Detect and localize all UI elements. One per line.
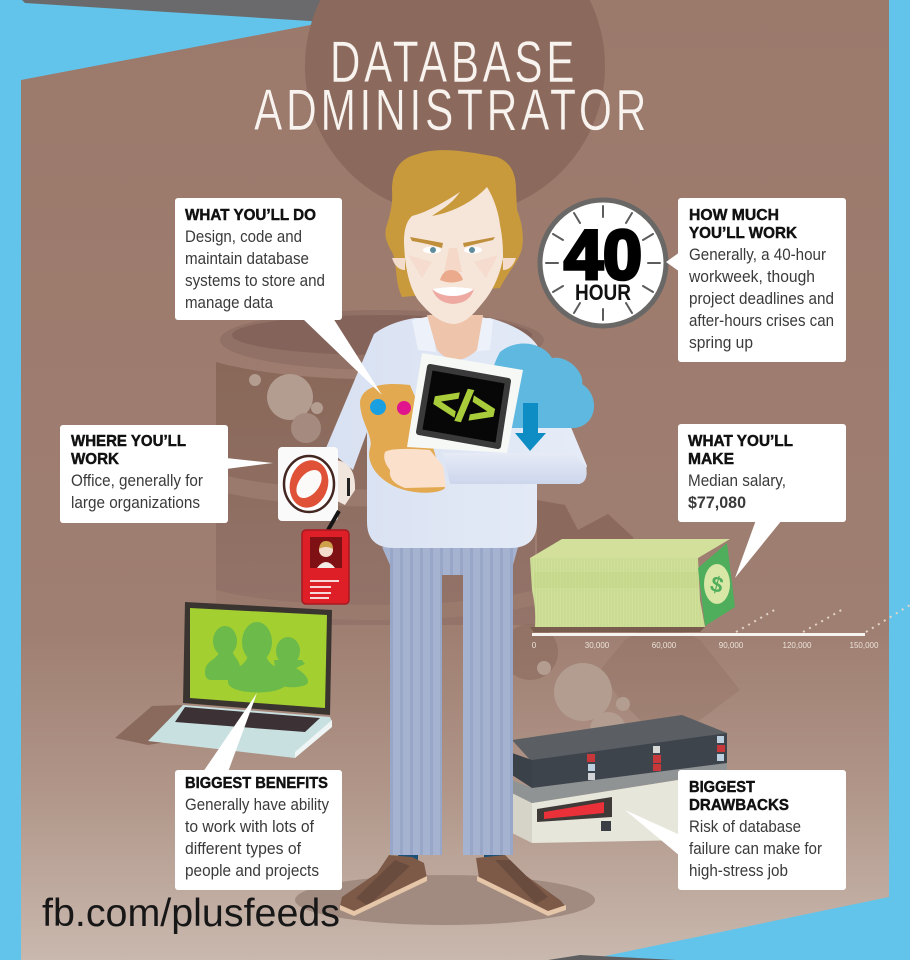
icon: server stack — [512, 715, 728, 843]
cheek blush — [408, 255, 498, 278]
callout: how much you'll work: after-hours crises can — [689, 312, 834, 330]
icon: laptop — [115, 602, 332, 758]
icon: code tablet: </> — [428, 376, 500, 437]
callout: biggest drawbacks: Risk of database — [689, 818, 801, 836]
mouth — [432, 287, 474, 304]
callout: biggest drawbacks: DRAWBACKS — [689, 797, 789, 814]
callout: what you'll do: maintain database — [185, 250, 309, 268]
callout: what you'll make: WHAT YOU’LL — [688, 433, 793, 450]
icon: code tablet — [407, 353, 523, 453]
salary axis: 150,000 — [850, 641, 879, 650]
nose — [440, 248, 463, 282]
callout: how much you'll work — [678, 198, 846, 362]
callout: what you'll do: Design, code and — [185, 228, 302, 246]
callout: where you'll work: Office, generally for — [71, 472, 203, 490]
callout: biggest benefits: Generally have ability — [185, 796, 330, 814]
callout: biggest benefits: to work with lots of — [185, 818, 314, 836]
hair — [385, 150, 523, 297]
icon: money stack — [530, 539, 735, 632]
icon: palette — [360, 384, 445, 493]
background: large circle behind title — [305, 0, 605, 216]
icon: clock: 40 — [564, 216, 642, 294]
salary axis: 0 — [532, 641, 537, 650]
callout: what you'll make: MAKE — [688, 451, 734, 468]
callout: biggest benefits — [175, 770, 342, 890]
callout: how much you'll work: YOU’LL WORK — [689, 225, 797, 242]
salary axis: 90,000 — [719, 641, 744, 650]
callout: where you'll work: WHERE YOU’LL — [71, 433, 186, 450]
collar — [412, 316, 493, 352]
background: bubbles — [249, 374, 630, 748]
icon: cloud with arrow — [490, 343, 594, 451]
title: ADMINISTRATOR — [254, 78, 650, 143]
callout: biggest drawbacks: high-stress job — [689, 862, 788, 880]
lanyard — [328, 511, 339, 530]
callout: how much you'll work: workweek, though — [688, 268, 815, 286]
callout: where you'll work — [60, 425, 228, 523]
eyes — [423, 246, 482, 254]
background: gears — [502, 500, 740, 740]
callout: what you'll do: WHAT YOU’LL DO — [185, 207, 316, 224]
callout: biggest benefits: people and projects — [185, 862, 319, 880]
bottom gray band — [548, 955, 676, 960]
shirt — [326, 318, 587, 548]
salary axis: 30,000 — [585, 641, 610, 650]
background: database cylinder — [216, 310, 544, 625]
top gray band — [22, 0, 450, 22]
face — [404, 187, 503, 324]
ears — [392, 258, 516, 270]
callout: biggest drawbacks: failure can make for — [689, 840, 822, 858]
neck — [427, 315, 483, 360]
callout: what you'll do — [175, 198, 342, 320]
title — [254, 30, 650, 143]
eyebrows — [410, 237, 495, 248]
salary axis: 60,000 — [652, 641, 677, 650]
callout: how much you'll work: spring up — [689, 334, 753, 352]
icon: ID badge — [302, 530, 349, 604]
hand — [384, 449, 446, 488]
callout: biggest benefits: BIGGEST BENEFITS — [185, 775, 328, 792]
callout: what you'll make: $77,080 — [688, 494, 746, 512]
callout pointers — [203, 252, 782, 856]
callout: how much you'll work: Generally, a 40-hour — [689, 246, 826, 264]
callout: where you'll work: WORK — [71, 451, 119, 468]
icon: clock: HOUR — [575, 280, 631, 305]
icon: money stack: $ — [708, 571, 726, 598]
callout: what you'll make: Median salary, — [688, 472, 786, 490]
callout: biggest benefits: different types of — [185, 840, 301, 858]
right shoe — [476, 855, 566, 916]
forearm — [443, 453, 587, 484]
callout: what you'll make — [678, 424, 846, 522]
watermark: fb.com/plusfeeds — [42, 892, 340, 935]
icon: mug — [278, 447, 355, 521]
salary axis: 120,000 — [783, 641, 812, 650]
socks — [398, 855, 504, 865]
person — [326, 150, 587, 916]
title: DATABASE — [330, 30, 578, 95]
pants — [382, 547, 518, 855]
callout: biggest drawbacks — [678, 770, 846, 890]
left shoe — [340, 855, 427, 916]
person shadow — [295, 875, 595, 925]
callout: how much you'll work: HOW MUCH — [689, 207, 779, 224]
callout: what you'll do: manage data — [185, 294, 274, 312]
callout: where you'll work: large organizations — [71, 494, 200, 512]
callout: how much you'll work: project deadlines and — [689, 290, 834, 308]
icon: clock — [540, 200, 666, 326]
salary axis — [532, 605, 910, 650]
callout: biggest drawbacks: BIGGEST — [689, 779, 755, 796]
callout: what you'll do: systems to store and — [185, 272, 325, 290]
